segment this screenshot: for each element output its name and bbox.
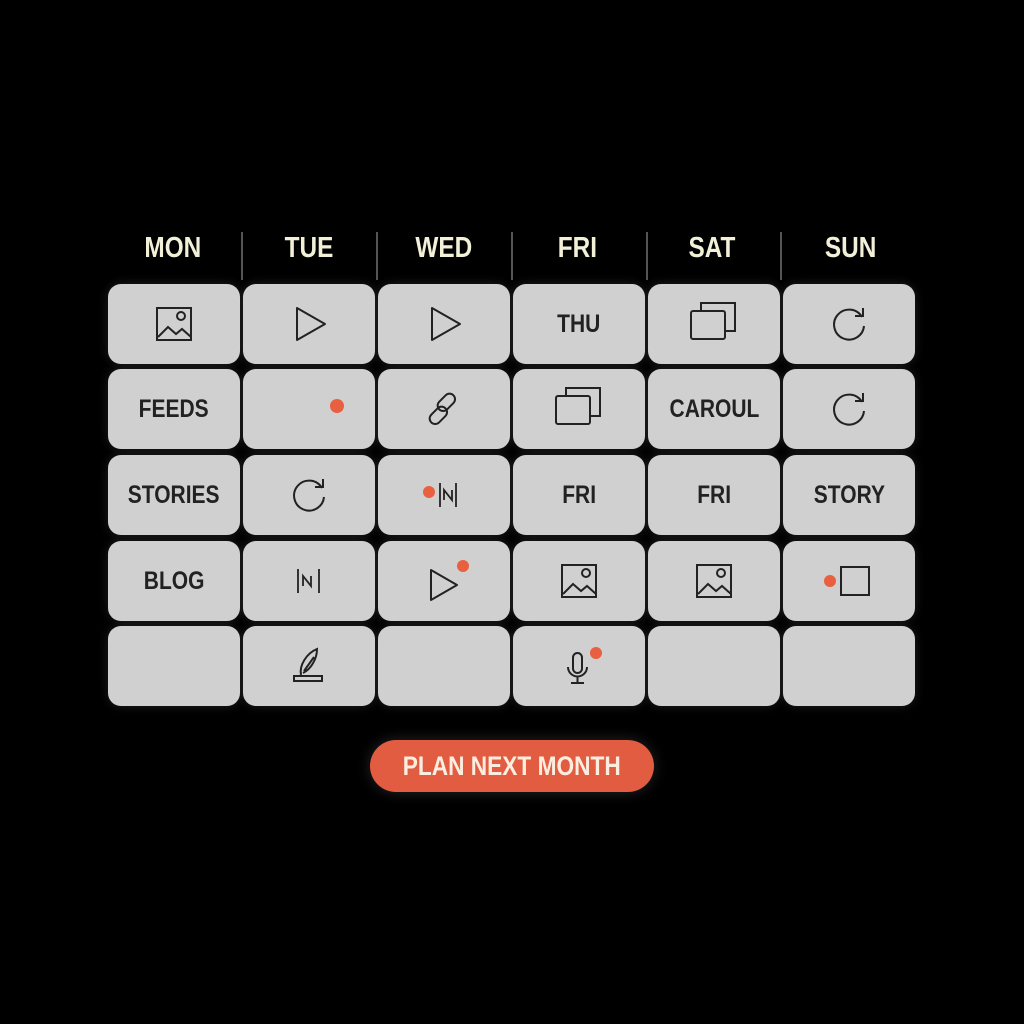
- cell: FRI: [648, 455, 780, 535]
- cell: THU: [513, 284, 645, 364]
- cell: STORY: [783, 455, 915, 535]
- cell: STORIES: STORIES: [128, 480, 220, 508]
- button: plan next month: PLAN NEXT MONTH: [403, 750, 621, 780]
- cell: dot + square: [783, 541, 915, 621]
- day SAT: SAT: [689, 232, 735, 264]
- cell: FEEDS: [108, 369, 240, 449]
- cell: refresh: [783, 284, 915, 364]
- cell: FEEDS: FEEDS: [139, 394, 209, 422]
- cell: dot + N: [378, 455, 510, 535]
- cell: BLOG: [108, 541, 240, 621]
- cell: STORY: STORY: [813, 480, 885, 508]
- cell: play: [378, 284, 510, 364]
- header: days: [145, 232, 877, 280]
- cell: STORIES: [108, 455, 240, 535]
- cell: image: [648, 541, 780, 621]
- cell: refresh: [783, 369, 915, 449]
- cell: image: [513, 541, 645, 621]
- cell: dot: [243, 369, 375, 449]
- button: plan next month: [370, 740, 654, 792]
- day SUN: SUN: [825, 232, 877, 264]
- day MON: MON: [145, 232, 201, 264]
- cell: empty: [108, 626, 240, 706]
- cell: CAROUL: [648, 369, 780, 449]
- cell: FRI: FRI: [697, 480, 731, 508]
- cell: mic + dot: [513, 626, 645, 706]
- cell: CAROUL: CAROUL: [669, 394, 759, 422]
- cell: image: [108, 284, 240, 364]
- day WED: WED: [416, 232, 472, 264]
- cell: refresh: [243, 455, 375, 535]
- calendar grid: [105, 281, 918, 709]
- cell: quill: [243, 626, 375, 706]
- day FRI: FRI: [557, 232, 597, 264]
- cell: FRI: [513, 455, 645, 535]
- cell: FRI: FRI: [562, 480, 596, 508]
- cell: copy: [648, 284, 780, 364]
- cell: THU: THU: [557, 310, 601, 338]
- cell: empty: [378, 626, 510, 706]
- cell: empty: [648, 626, 780, 706]
- day TUE: TUE: [285, 232, 333, 264]
- cell: BLOG: BLOG: [144, 566, 204, 594]
- cell: copy: [513, 369, 645, 449]
- cell: empty: [783, 626, 915, 706]
- cell: N: [243, 541, 375, 621]
- cell: link: [378, 369, 510, 449]
- cell: play: [243, 284, 375, 364]
- cell: play + dot: [378, 541, 510, 621]
